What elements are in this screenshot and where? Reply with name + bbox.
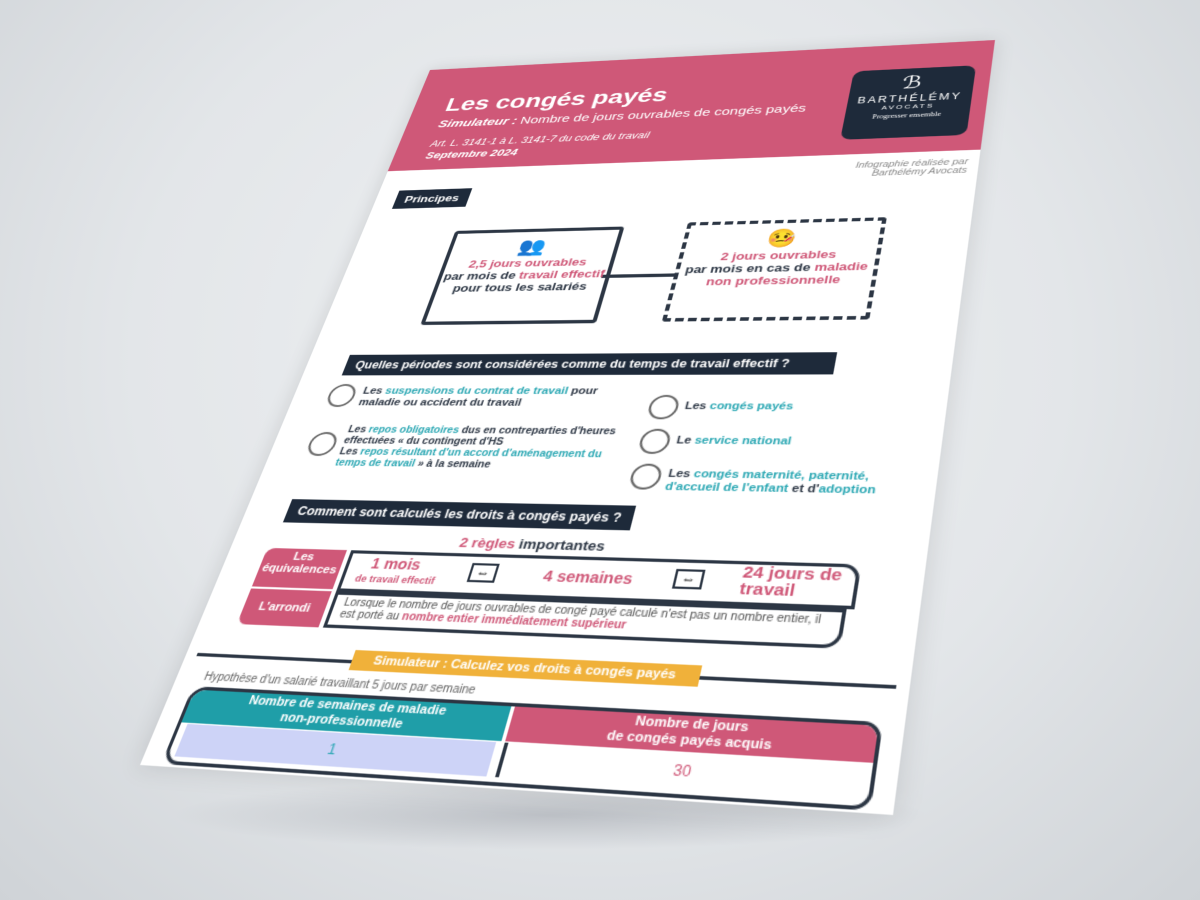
logo: BARTHÉLÉMY: [857, 91, 963, 106]
label: équivalences: Les: [291, 551, 316, 563]
icon: [304, 432, 340, 456]
simulator banner: Simulateur : Calculez vos droits à congés payés: [371, 654, 677, 682]
list: right column: [630, 394, 877, 497]
header band: [388, 40, 995, 171]
equivalence row: 24 jours de travail: [738, 563, 844, 600]
input cell: 1: [325, 741, 339, 758]
result cell: [495, 743, 874, 801]
item: service national: Le service national: [675, 435, 792, 447]
icon: [637, 429, 673, 454]
connector: [601, 273, 675, 278]
logo: AVOCATS: [881, 102, 935, 111]
simulator table: [161, 686, 883, 811]
box: 2 days sickness: 🤒: [765, 228, 799, 249]
box: 2 days sickness: [662, 217, 887, 322]
paper sheet: [140, 40, 995, 815]
item: congés payés: Les congés payés: [684, 401, 794, 412]
date: Septembre 2024: [424, 147, 519, 161]
pink header: Nombre de jours: [634, 714, 750, 735]
banner: periods: Quelles périodes sont considérées comme du temps de travail effectif ?: [353, 357, 791, 371]
logo: Progresser ensemble: [872, 111, 941, 120]
subtitle: Simulateur : Nombre de jours ouvrables de congés payés: [436, 102, 807, 130]
label: arrondi: L'arrondi: [256, 600, 312, 615]
pink header: [505, 707, 883, 763]
box: 2.5 days: pour tous les salariés: [451, 280, 589, 294]
box: 2.5 days: [420, 226, 625, 325]
floor shadow: [170, 780, 930, 850]
banner: periods: [342, 352, 837, 375]
logo: ℬ: [901, 74, 923, 93]
rules heading: 2 règles importantes: [458, 535, 607, 554]
teal header: non-professionnelle: [278, 711, 405, 732]
result cell: 30: [672, 761, 693, 780]
item: repos: Les repos obligatoires dus en contreparties d'heures effectuées « du contingent d'HS: [342, 425, 617, 448]
credit text: Infographie réalisée par Barthélémy Avocats: [855, 158, 969, 178]
simulator banner: [349, 650, 702, 687]
teal header: Nombre de semaines de maladie: [247, 694, 448, 718]
divider line: [196, 653, 896, 689]
banner: calculation: Comment sont calculés les droits à congés payés ?: [295, 504, 623, 525]
rules table: [238, 453, 860, 648]
box: 2 days sickness: 2 jours ouvrables: [719, 248, 838, 263]
list: left column: [308, 384, 617, 470]
equivalence row: 4 semaines: [541, 567, 635, 587]
legal reference: Art. L. 3141-1 à L. 3141-7 du code du travail: [429, 130, 651, 149]
equivalence row: ⇔: [474, 565, 492, 580]
label: arrondi: [237, 588, 332, 627]
item: maternité: Les congés maternité, paternité, d'accueil de l'enfant et d'adoption: [664, 468, 877, 497]
label: équivalences: [252, 548, 347, 589]
banner: calculation: [283, 499, 636, 530]
principles label: Principes: [403, 192, 461, 205]
icon: [628, 464, 664, 490]
box: 2.5 days: 👥: [516, 236, 550, 256]
logo: [840, 65, 976, 140]
title: Les congés payés: [442, 84, 671, 115]
equivalence row: ⇔: [680, 571, 698, 587]
icon: [324, 384, 359, 407]
principles label: [392, 188, 472, 209]
input cell: [174, 724, 496, 777]
item: suspensions: Les suspensions du contrat de travail pour maladie ou accident du travail: [357, 386, 599, 408]
box: 2.5 days: 2,5 jours ouvrables: [467, 256, 589, 270]
equivalence row: de travail effectif: [353, 573, 436, 586]
item: repos: [333, 424, 617, 470]
box: 2.5 days: par mois de travail effectif: [442, 267, 606, 282]
rounding row: Lorsque le nombre de jours ouvrables de congé payé calculé n'est pas un nombre entier, il est porté au nombre entier immédiatement supérieur: [338, 597, 822, 632]
equivalence row: 1 mois: [369, 555, 423, 573]
box: 2 days sickness: par mois en cas de maladie non professionnelle: [684, 260, 869, 288]
teal header: [181, 690, 511, 741]
label: équivalences: équivalences: [260, 562, 339, 577]
hypothesis note: Hypothèse d'un salarié travaillant 5 jours par semaine: [202, 671, 477, 697]
pink header: de congés payés acquis: [605, 729, 773, 753]
icon: [646, 395, 681, 419]
rounding row: [323, 591, 847, 649]
item: repos: Les repos résultant d'un accord d'aménagement du temps de travail » à la semaine: [333, 447, 603, 470]
equivalence row: [336, 550, 862, 609]
